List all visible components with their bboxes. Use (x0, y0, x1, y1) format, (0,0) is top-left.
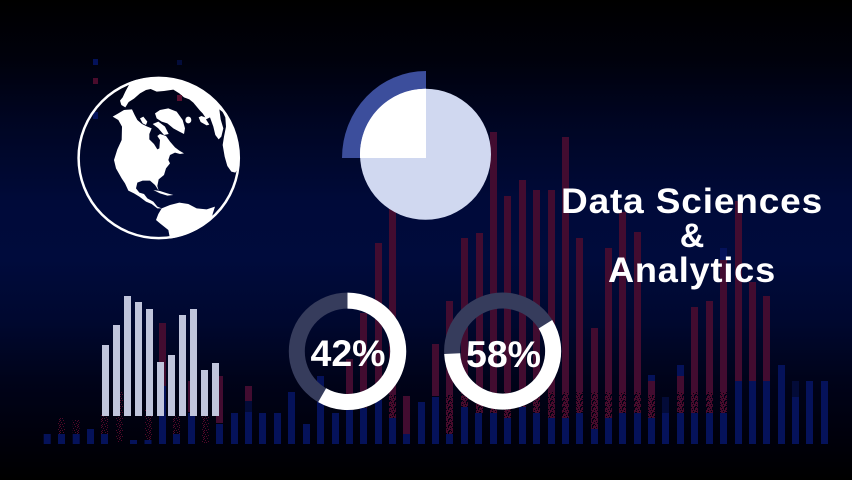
label 42%: 42% (310, 332, 386, 374)
island blob (185, 117, 191, 123)
icon: globe (79, 77, 239, 239)
label 58%: 58% (466, 333, 541, 375)
pie disc (360, 89, 491, 220)
red dot over globe (177, 95, 182, 101)
Caribbean islands (153, 190, 173, 196)
title: Data Sciences (561, 182, 823, 221)
North America (113, 109, 184, 208)
pie white quarter (360, 89, 426, 158)
pie outer blue quarter (342, 71, 426, 158)
small top dots (93, 59, 182, 119)
Arctic island small (140, 117, 147, 125)
Arctic island large (155, 108, 185, 134)
Arctic island middle (153, 122, 169, 135)
pie chart (342, 71, 491, 220)
dim blue bar caps (245, 381, 799, 413)
blue bars (44, 248, 828, 444)
background bar chart (44, 59, 828, 444)
title: & (680, 217, 704, 255)
globe outline (79, 78, 239, 238)
South America (156, 203, 215, 239)
title (561, 182, 823, 290)
donut chart: 42% (297, 301, 398, 402)
donut chart: 58% (452, 300, 553, 402)
arctic and east land mass (120, 77, 239, 173)
red dense dither (346, 392, 727, 434)
white bar chart (102, 296, 219, 416)
title: Analytics (608, 251, 776, 290)
red bars (159, 132, 770, 434)
red sparse dither (58, 392, 209, 443)
